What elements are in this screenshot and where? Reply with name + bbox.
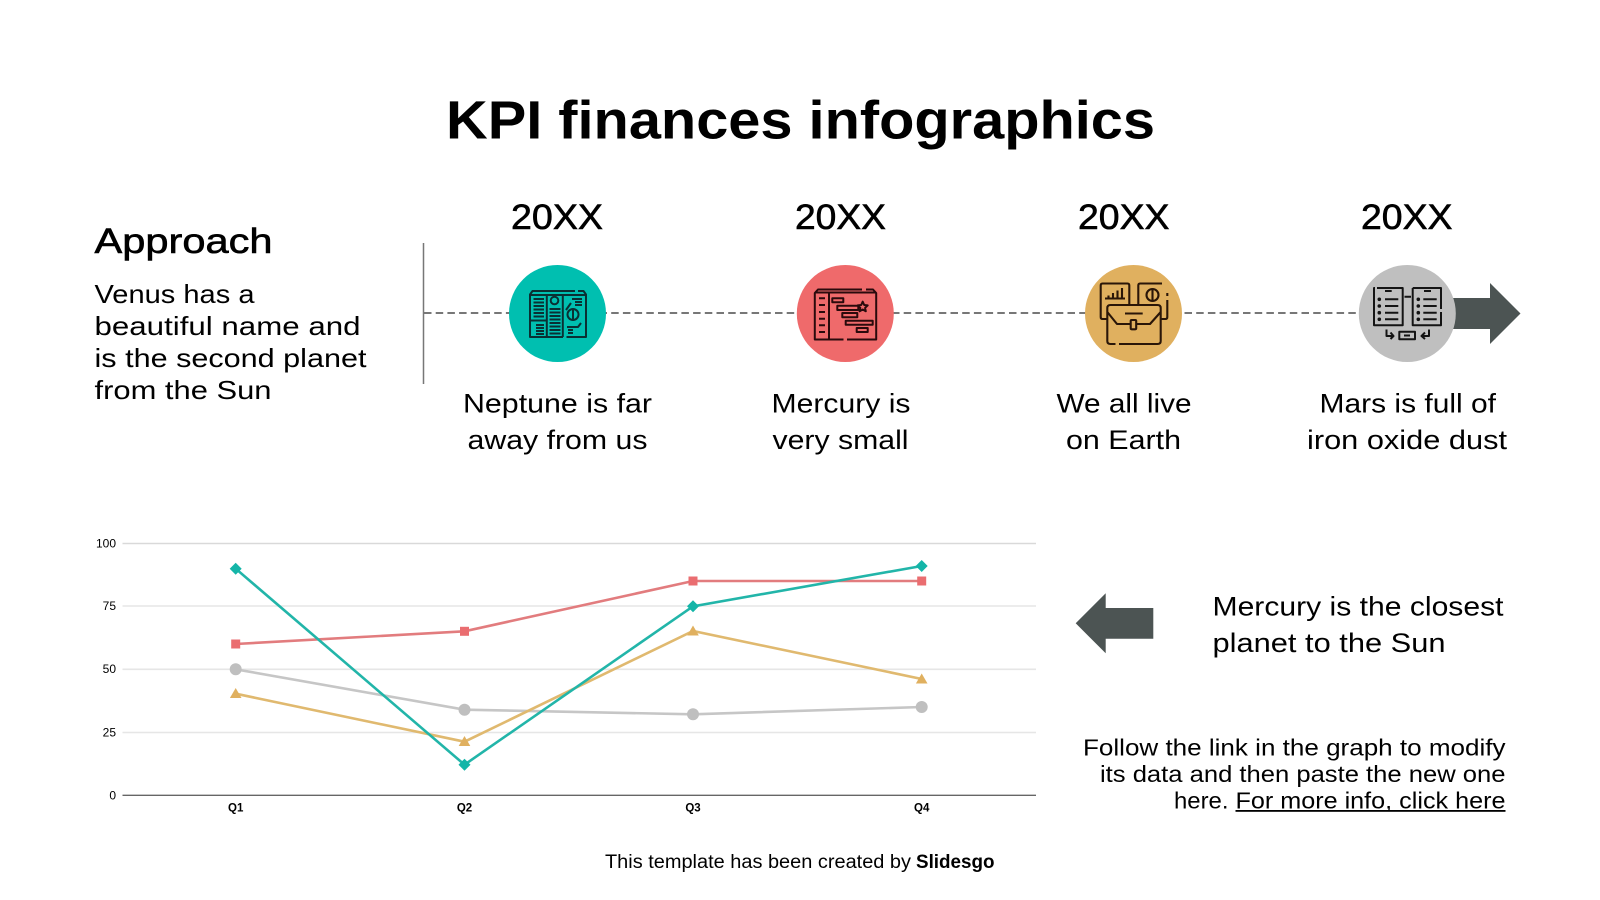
arrow: timeline right: [1450, 283, 1520, 344]
text block: graph instructions: its data and then paste the new one: [1100, 761, 1506, 787]
text block: graph instructions: [1083, 734, 1506, 814]
y axis labels: 25: [103, 726, 116, 740]
caption 3: We all live: [1056, 388, 1192, 418]
y axis labels: 0: [109, 788, 116, 802]
text block: approach description: is the second planet: [94, 343, 367, 373]
series: gray circles: [230, 663, 928, 720]
x axis labels: Q4: [914, 802, 930, 814]
caption 4: [1307, 388, 1508, 455]
series: teal diamonds: [230, 560, 928, 771]
caption 2: [772, 388, 910, 455]
text block: approach description: beautiful name and: [94, 311, 360, 341]
caption 3: on Earth: [1066, 425, 1181, 455]
panel: approach: [94, 222, 367, 405]
text block: approach description: [94, 279, 367, 405]
text block: approach description: from the Sun: [94, 375, 272, 405]
text block: graph instructions: Follow the link in the graph to modify: [1083, 734, 1506, 760]
icon: gantt chart on red circle: [797, 265, 894, 362]
footer credit: This template has been created by: [605, 852, 912, 873]
x axis labels: Q1: [228, 802, 244, 814]
year label 3: 20XX: [1078, 198, 1170, 237]
caption 2: very small: [772, 425, 908, 455]
callout: mercury: planet to the Sun: [1212, 628, 1446, 658]
panel: timeline step 4: [1307, 198, 1508, 455]
year label 1: 20XX: [511, 198, 603, 237]
icon: comparison lists on gray circle: [1359, 265, 1456, 362]
title: KPI finances infographics: [446, 90, 1155, 150]
callout: mercury: Mercury is the closest: [1212, 592, 1504, 622]
caption 4: iron oxide dust: [1307, 425, 1508, 455]
icon: dashboard on teal circle: [509, 265, 606, 362]
text block: graph instructions: here.: [1174, 788, 1228, 814]
line chart: [96, 536, 1036, 814]
text block: approach description: Venus has a: [94, 279, 255, 309]
year label 2: 20XX: [795, 198, 886, 237]
callout: mercury: [1212, 592, 1504, 658]
series: gold triangles: [230, 626, 927, 746]
heading: approach: Approach: [94, 222, 272, 261]
footer credit: Slidesgo: [916, 852, 994, 873]
y axis labels: 75: [103, 599, 116, 613]
caption 1: away from us: [468, 425, 648, 455]
y axis labels: 100: [96, 536, 116, 550]
x axis labels: [228, 802, 930, 814]
icon: briefcase on gold circle: [1085, 265, 1182, 362]
y axis labels: [96, 536, 116, 802]
year label 4: 20XX: [1361, 198, 1452, 237]
arrow: pointing to chart: [1076, 593, 1153, 653]
x axis labels: Q3: [685, 802, 701, 814]
panel: timeline step 2: [772, 198, 910, 455]
caption 4: Mars is full of: [1320, 388, 1497, 418]
x axis labels: Q2: [457, 802, 472, 814]
panel: timeline step 1: [463, 198, 652, 455]
panel: timeline step 3: [1056, 198, 1192, 455]
caption 2: Mercury is: [772, 388, 910, 418]
series: red squares: [231, 576, 926, 648]
y axis labels: 50: [103, 662, 116, 676]
text block: graph instructions: For more info, click here: [1236, 788, 1506, 814]
caption 3: [1056, 388, 1192, 455]
caption 1: [463, 388, 652, 455]
caption 1: Neptune is far: [463, 388, 652, 418]
